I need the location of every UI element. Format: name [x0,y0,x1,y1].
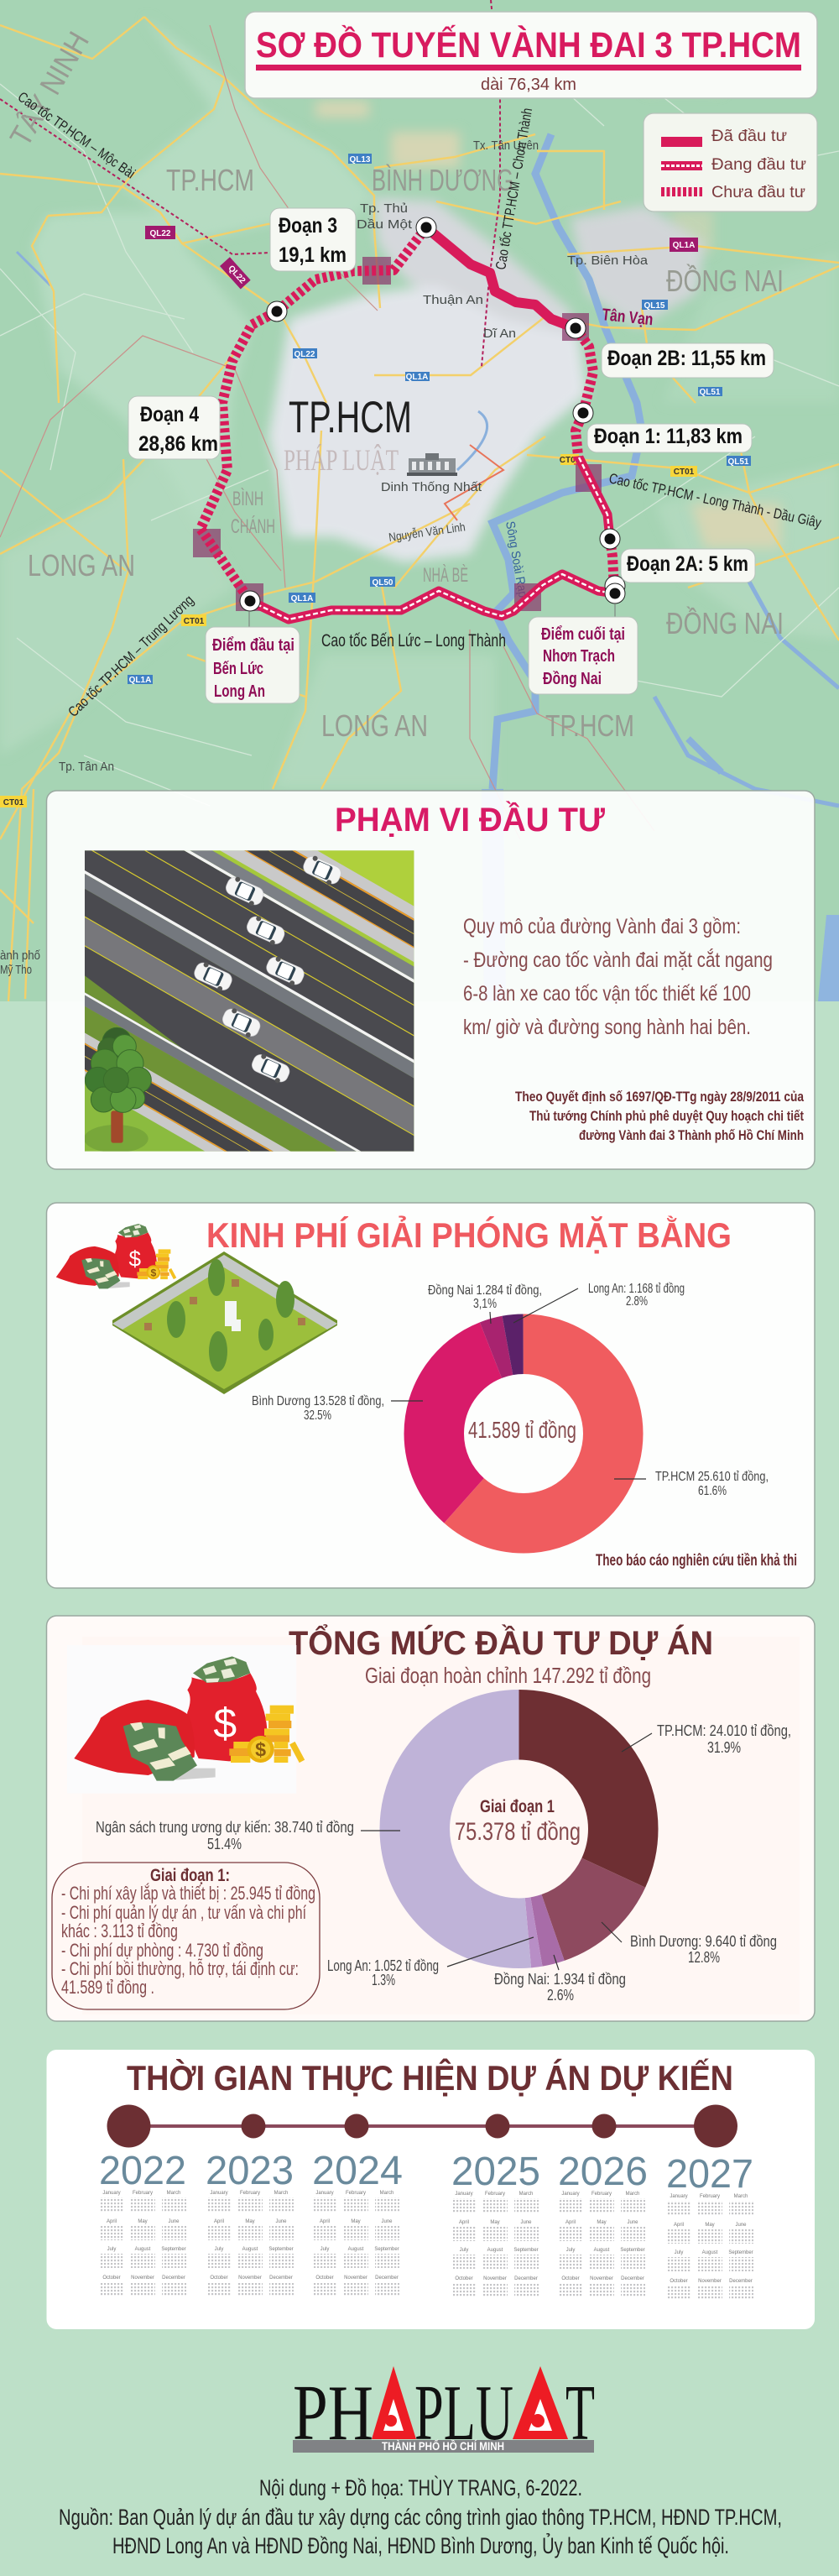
phase 1 cost box: - Chi phí dự phòng : 4.730 tỉ đồng [61,1940,263,1961]
panel: total investment [47,1616,815,2021]
map place labels: Thuận An [423,293,483,307]
calendar 2026: November [590,2276,613,2281]
calendar 2024: June [381,2219,393,2224]
calendar 2022: January [102,2191,121,2196]
calendar 2025: June [520,2220,532,2225]
calendar 2024: November [344,2276,367,2281]
road shields: QL51 [699,388,721,397]
calendar 2023: October [210,2276,228,2281]
calendar 2024: July [320,2247,329,2252]
calendar 2025: January [455,2192,473,2197]
chart labels: TP.HCM: 24.010 tỉ đồng, [657,1722,791,1739]
calendar 2026: January [561,2192,580,2197]
scope description: 6-8 làn xe cao tốc vận tốc thiết kế 100 [463,982,751,1006]
road shields: QL22 [226,264,248,286]
label: Tân Vạn: Tân Vạn [601,306,654,329]
calendar 2023: 2023 [206,2149,294,2193]
watermark: Pháp Luật: PHÁP LUẬT [284,443,399,477]
map region labels: BÌNH DƯƠNG [372,163,513,197]
calendar 2023: April [214,2219,224,2224]
callout: Đoạn 4: Đoạn 4 [140,403,199,426]
phase 1 cost box: - Chi phí bồi thường, hỗ trợ, tái định cư: [61,1958,299,1979]
calendar 2026: 2026 [558,2150,648,2194]
callout: end point [529,617,638,694]
icon: money bags small: $ [150,1267,156,1279]
expressway dashed lines [0,0,500,367]
chart labels: Đồng Nai 1.284 tỉ đồng, [428,1283,542,1298]
calendar 2027: 2027 [666,2152,753,2197]
chart labels: 2.6% [547,1987,574,2004]
chart labels: Bình Dương: 9.640 tỉ đồng [630,1933,777,1950]
calendar 2025: April [459,2220,469,2225]
title box [245,12,817,98]
calendar 2025 [451,2150,540,2297]
icon: money bags small: $ [128,1246,141,1271]
logo: Pháp Luật: PH [293,2370,373,2457]
callout: Đoạn 3 [270,208,356,271]
subheading: Giai đoạn hoàn chỉnh 147.292 tỉ đồng [365,1663,651,1688]
callout: Đoạn 1: Đoạn 1: 11,83 km [594,425,743,448]
scope description: km/ giờ và đường song hành hai bên. [463,1016,751,1039]
calendar 2023: March [274,2191,288,2196]
chart labels [96,1722,791,2004]
calendar 2026: July [566,2248,575,2253]
map region labels: TP.HCM [545,708,634,743]
calendar 2026: April [565,2220,576,2225]
calendar 2025: December [514,2276,538,2281]
chart labels: 51.4% [207,1836,242,1852]
route: not yet invested segments [201,227,614,601]
calendar 2026: October [561,2276,580,2281]
map place labels: Tp. Tân An [59,760,114,774]
icon: money bags: $ [213,1700,237,1747]
expressway labels [15,89,823,720]
calendar 2024: August [348,2247,364,2252]
road shields: QL1A [129,676,151,685]
map region labels: ĐỒNG NAI [666,263,784,298]
map background [0,0,839,1007]
calendar 2022: June [168,2219,180,2224]
calendar 2025: July [460,2248,468,2253]
calendar 2027: June [735,2223,747,2228]
calendar 2025: September [513,2248,539,2253]
road shields: CT01 [560,456,581,465]
icon: money bags small [56,1224,175,1288]
calendar 2024: April [320,2219,330,2224]
calendar 2027: November [698,2279,722,2284]
callout: Đoạn 4: 28,86 km [138,432,218,456]
calendar 2025: May [490,2220,500,2225]
calendar 2023: September [268,2247,294,2252]
callout: Đoạn 3: Đoạn 3 [279,214,337,238]
calendar 2024: October [315,2276,334,2281]
expressway labels: Cao tốc TTP.HCM – Chơn Thành [492,107,535,271]
callout: start point: Long An [214,682,265,701]
map region labels [3,26,784,743]
calendar 2022: April [107,2219,117,2224]
calendar 2022: December [162,2276,185,2281]
map region labels: ĐỒNG NAI [666,605,784,640]
panel: investment scope [45,790,816,1170]
phase 1 cost box: - Chi phí quản lý dự án , tư vấn và chi phí [61,1902,306,1923]
interchange squares [193,257,602,611]
calendar 2023: February [240,2191,260,2196]
timeline [107,2105,737,2147]
calendar 2022 [99,2149,186,2296]
map place labels: Tp. Thủ [360,201,408,216]
map region labels: CHÁNH [231,515,275,538]
road shields: CT01 [184,617,205,626]
map place labels: Mỹ Tho [0,963,32,977]
calendar 2027: September [728,2250,753,2255]
scope description [463,915,773,1039]
road shields: QL22 [149,229,171,238]
calendar 2027 [666,2152,753,2300]
donut chart [96,1722,791,2004]
map region labels: TÂY NINH [3,26,96,152]
phase 1 cost box: - Chi phí xây lắp và thiết bị : 25.945 tỉ đồng [61,1883,315,1904]
road shields: QL22 [294,350,315,359]
calendar 2025: October [455,2276,473,2281]
calendar 2023: January [210,2191,228,2196]
road shields: CT01 [3,798,24,807]
chart center: Giai đoạn 1 [480,1797,555,1816]
chart center: 75.378 tỉ đồng [455,1818,581,1846]
legend: Đang đầu tư [711,156,806,174]
road shields: QL1A [673,241,695,250]
chart labels: 3,1% [473,1297,497,1311]
calendar 2027: February [700,2194,720,2199]
road shields: QL50 [372,578,393,588]
panel: land clearance cost [47,1203,815,1588]
chart labels: 2.8% [626,1294,648,1309]
map region labels: BÌNH [232,488,263,510]
river label: Sông Soài Rạp [503,520,530,598]
credits [59,2474,782,2558]
calendar 2022: May [138,2219,148,2224]
calendar 2024: May [351,2219,361,2224]
calendar 2023: November [238,2276,262,2281]
callout: Đoạn 2B [602,343,774,378]
expressway labels: Cao tốc Bến Lức – Long Thành [321,631,506,651]
map place labels: Nguyễn Văn Linh [388,520,466,544]
heading: PHẠM VI ĐẦU TƯ [335,800,606,839]
calendar 2022: February [133,2191,153,2196]
legend: Đã đầu tư [711,128,787,145]
icon: park plot [112,1251,337,1394]
calendar 2026 [558,2150,648,2297]
calendar 2022: July [107,2247,116,2252]
callout: end point: Nhơn Trạch [543,647,615,666]
road shields: QL13 [349,155,371,165]
map place labels: Tp. Biên Hòa [567,253,649,268]
calendar 2026: March [626,2192,639,2197]
callout: Đoạn 2B: Đoạn 2B: 11,55 km [607,347,766,370]
chart total: 41.589 tỉ đồng [468,1417,576,1443]
calendar 2027: May [705,2223,715,2228]
panel: timeline [47,2050,815,2329]
road shields [0,154,751,807]
heading: KINH PHÍ GIẢI PHÓNG MẶT BẰNG [206,1215,732,1255]
subtitle: dài 76,34 km [481,76,576,94]
road shields: QL51 [727,457,749,467]
chart labels: Đồng Nai: 1.934 tỉ đồng [494,1971,626,1988]
calendar 2023: June [275,2219,287,2224]
chart labels: Long An: 1.052 tỉ đồng [327,1957,439,1974]
icon: money bags [67,1645,302,1794]
callout: start point [206,603,615,703]
scope description: Quy mô của đường Vành đai 3 gồm: [463,915,741,938]
road shields: QL15 [644,301,665,311]
calendar 2022: 2022 [99,2149,186,2193]
calendar 2026: December [621,2276,644,2281]
phase 1 cost box: khác : 3.113 tỉ đồng [61,1920,178,1941]
route: under investment segments [250,457,615,619]
credits: Nội dung + Đồ họa: THÙY TRANG, 6-2022. [259,2474,582,2500]
map title: TP.HCM: TP.HCM [289,393,412,442]
calendar 2023: August [242,2247,258,2252]
logo: Pháp Luật: PLU [414,2370,513,2457]
map region labels: LONG AN [28,548,135,583]
donut chart [252,1282,769,1523]
phase 1 cost box: Giai đoạn 1: [150,1866,230,1885]
heading: TỔNG MỨC ĐẦU TƯ DỰ ÁN [289,1622,713,1662]
callout: Đoạn 3: 19,1 km [279,243,347,267]
scope description: - Đường cao tốc vành đai mặt cắt ngang [463,948,773,972]
chart labels: TP.HCM 25.610 tỉ đồng, [655,1470,769,1484]
map region labels: LONG AN [321,708,428,743]
map place labels: Dĩ An [483,327,516,341]
chart center [455,1797,581,1846]
calendar 2024: January [315,2191,334,2196]
decision reference [515,1089,804,1143]
calendar 2022: October [102,2276,121,2281]
calendar 2025: August [487,2248,503,2253]
phase 1 cost box [52,1863,320,2009]
calendar 2024: February [346,2191,366,2196]
map place labels: Dinh Thống Nhất [381,480,482,494]
calendar 2023: December [269,2276,293,2281]
chart labels: 61.6% [698,1484,727,1498]
route nodes [240,217,625,611]
calendar 2024: December [375,2276,399,2281]
calendar 2027: January [670,2194,688,2199]
calendar 2027: October [670,2279,688,2284]
map place labels: ành phố [0,948,41,963]
chart labels: 12.8% [688,1949,720,1966]
map region labels: NHÀ BÈ [423,564,468,587]
road shields: QL1A [406,373,428,382]
calendar 2025: March [519,2192,533,2197]
calendar 2024: September [374,2247,399,2252]
calendar 2023: July [215,2247,223,2252]
heading: THỜI GIAN THỰC HIỆN DỰ ÁN DỰ KIẾN [127,2057,733,2098]
calendar 2023: May [245,2219,255,2224]
calendar 2022: September [161,2247,186,2252]
title underline [256,65,801,71]
calendar 2027: July [675,2250,683,2255]
callout: end point: Đồng Nai [543,670,602,688]
logo: Pháp Luật: T [565,2370,595,2457]
phase 1 cost box: 41.589 tỉ đồng . [61,1977,154,1998]
calendar 2024 [312,2149,403,2296]
callout: start point: Bến Lức [213,660,263,678]
chart labels: 1.3% [372,1972,395,1988]
calendar 2026: September [620,2248,645,2253]
logo: Pháp Luật: THÀNH PHỐ HỒ CHÍ MINH [382,2438,504,2453]
calendar 2022: August [135,2247,151,2252]
road illustration [85,850,414,1152]
calendar 2022: March [167,2191,180,2196]
legend [644,113,817,212]
callout: Đoạn 2A [621,549,755,583]
callout: Đoạn 4 [128,396,220,459]
map place labels: Dầu Một [357,217,413,232]
calendar 2022: November [131,2276,154,2281]
map region labels: TP.HCM [166,163,254,197]
expressway labels: Cao tốc TP.HCM – Trung Lương [65,592,197,720]
chart labels [252,1282,769,1498]
chart labels: Bình Dương 13.528 tỉ đồng, [252,1394,384,1408]
legend: Chưa đầu tư [711,184,805,201]
expressway labels: Cao tốc TP.HCM – Mộc Bài [15,89,138,181]
calendar 2027: August [702,2250,718,2255]
calendar 2026: May [597,2220,607,2225]
calendar 2025: February [485,2192,505,2197]
calendar 2024: 2024 [312,2149,403,2193]
icon: Dinh Thống Nhất building [407,453,457,476]
calendar 2026: February [591,2192,612,2197]
logo: Pháp Luật [293,2366,595,2457]
calendar 2027: March [734,2194,748,2199]
chart labels: 31.9% [707,1739,741,1756]
calendar 2024: March [380,2191,393,2196]
calendar 2027: April [674,2223,684,2228]
callout: Đoạn 2A: Đoạn 2A: 5 km [627,552,748,576]
road shields: CT01 [674,468,695,477]
map place labels [0,138,649,977]
chart labels: 32.5% [304,1408,331,1423]
chart labels: Ngân sách trung ương dự kiến: 38.740 tỉ đồng [96,1819,354,1836]
calendar 2026: August [594,2248,610,2253]
calendar 2025: 2025 [451,2150,540,2194]
calendar 2023 [206,2149,294,2296]
icon: money bags: $ [255,1739,266,1761]
calendar 2027: December [729,2279,753,2284]
callout: end point: Điểm cuối tại [541,625,625,644]
callout: start point: Điểm đầu tại [212,636,294,655]
route: invested segment [426,227,576,328]
calendar 2025: November [483,2276,507,2281]
map place labels: Tx. Tân Uyên [473,138,539,153]
calendar 2026: June [627,2220,638,2225]
road shields: QL1A [291,594,313,604]
chart labels: Long An: 1.168 tỉ đồng [588,1282,685,1296]
